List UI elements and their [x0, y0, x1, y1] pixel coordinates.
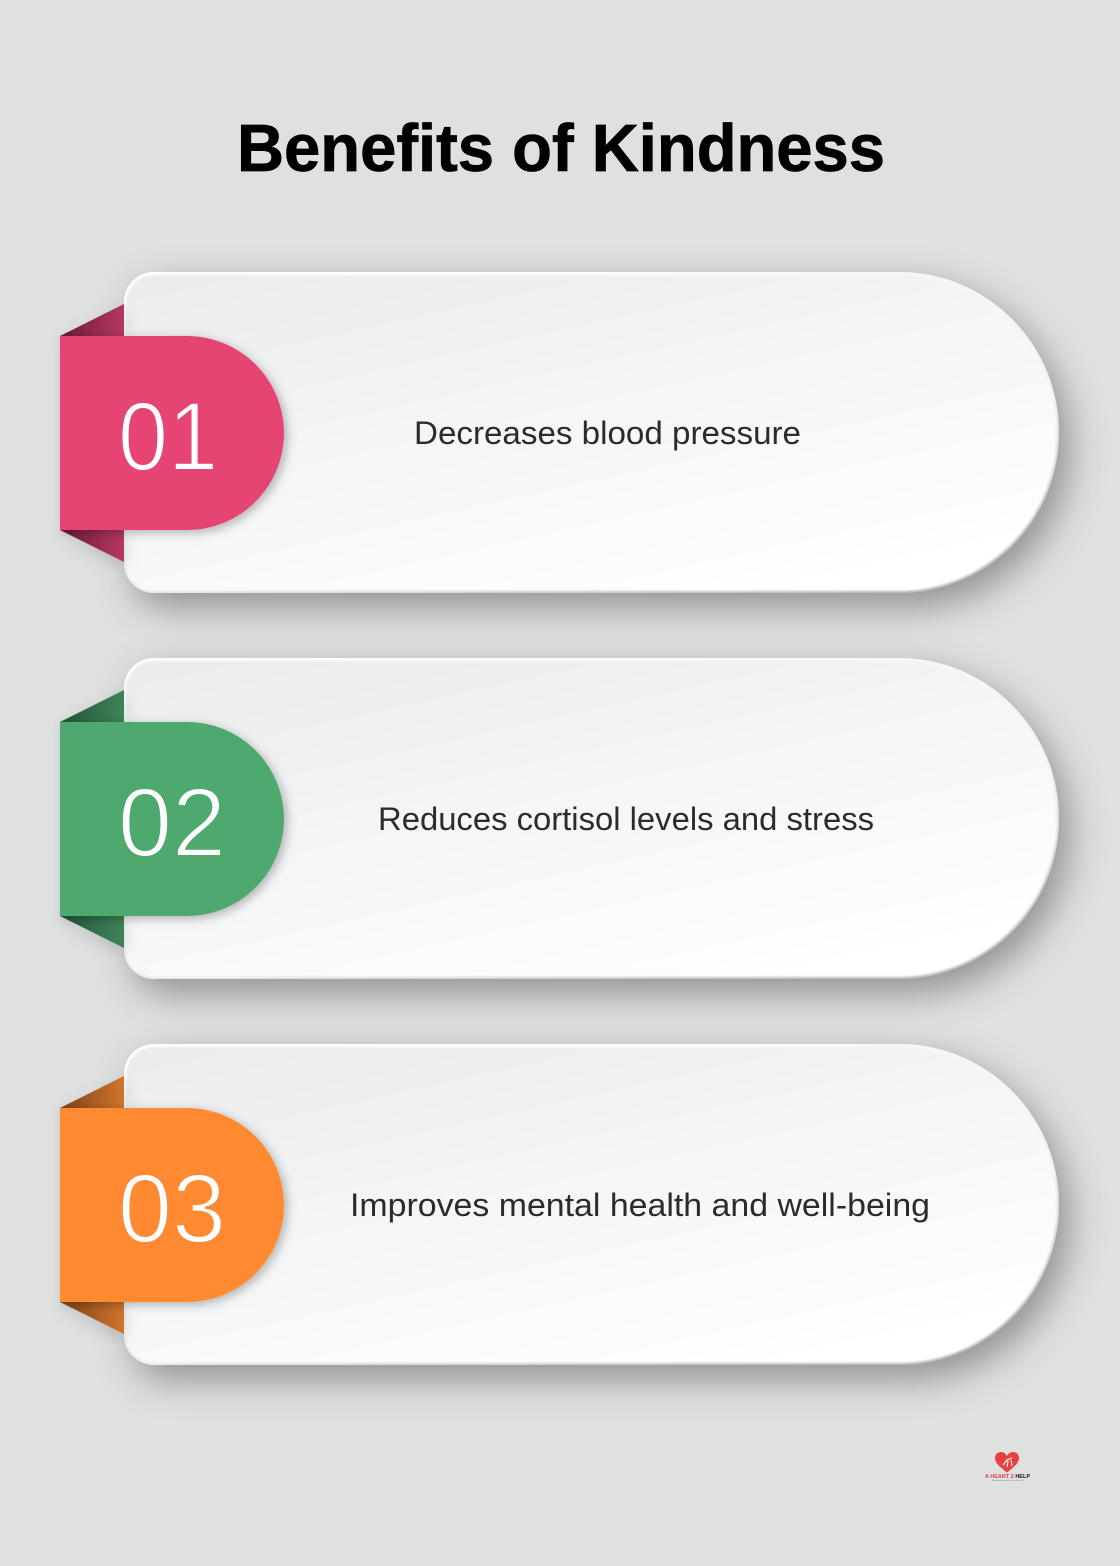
badge: number 01: [60, 336, 284, 530]
badge: number 01: 01: [118, 382, 218, 491]
title: Benefits of Kindness: [237, 111, 885, 186]
text: benefit 02: Reduces cortisol levels and stress: [378, 801, 874, 837]
fold: top ribbon 03: [60, 1076, 124, 1108]
icon: heart: [995, 1452, 1019, 1472]
fold: top ribbon 01: [60, 304, 124, 336]
badge: number 03: [60, 1108, 284, 1302]
badge: number 03: 03: [118, 1154, 226, 1263]
logo wordmark: A HEART 2 HELP: [985, 1474, 1030, 1480]
badge: number 02: 02: [118, 768, 226, 877]
panel: benefit 03: [60, 1044, 1059, 1365]
card: benefit 03: [124, 1044, 1059, 1365]
text: benefit 01: Decreases blood pressure: [414, 415, 801, 451]
logo tagline: Kindness and care for all: [992, 1480, 1024, 1482]
fold: bottom ribbon 02: [60, 916, 124, 948]
badge: number 02: [60, 722, 284, 916]
fold: top ribbon 02: [60, 690, 124, 722]
fold: bottom ribbon 01: [60, 530, 124, 562]
fold: bottom ribbon 03: [60, 1302, 124, 1334]
text: benefit 03: Improves mental health and well-being: [350, 1187, 930, 1223]
panel: benefit 02: [60, 658, 1059, 979]
icon: figures in heart: [1003, 1458, 1012, 1467]
card: benefit 02: [124, 658, 1059, 979]
card: benefit 01: [124, 272, 1059, 593]
logo: A Heart 2 Help: [985, 1452, 1030, 1482]
panel: benefit 01: [60, 272, 1059, 593]
